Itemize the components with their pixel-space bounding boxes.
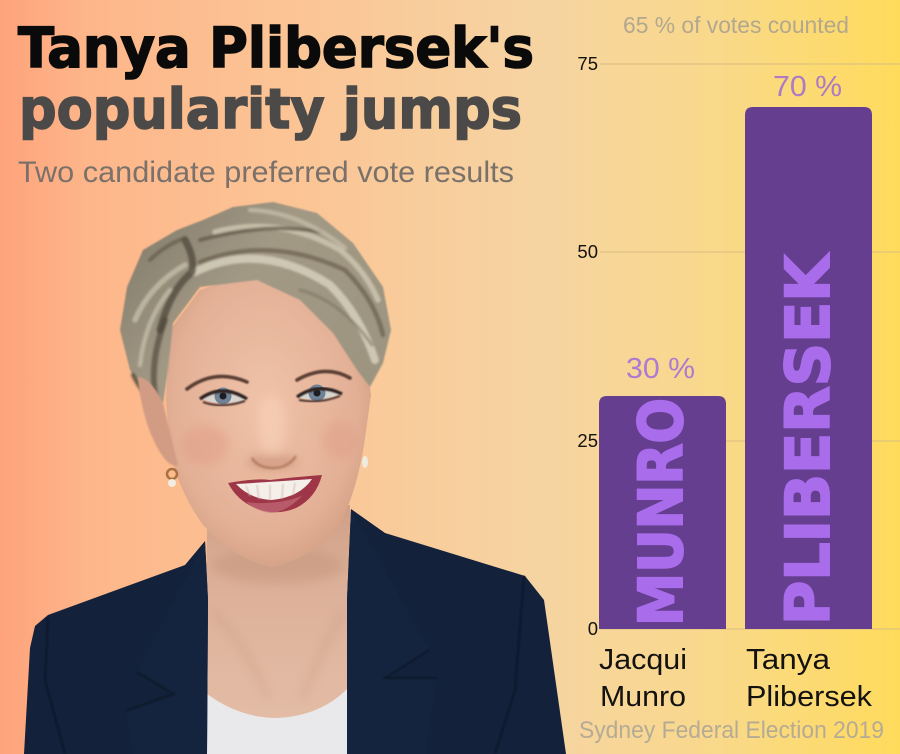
portrait: Tanya Plibersek (24, 202, 566, 754)
left ear (138, 377, 178, 466)
bar: Munro (599, 396, 726, 629)
jacket (24, 509, 566, 754)
y axis labels: 25 (577, 430, 598, 451)
eyebrows (187, 371, 350, 389)
y axis labels: 75 (577, 53, 598, 74)
hair (120, 202, 391, 403)
neck (205, 505, 350, 725)
neck creases (212, 610, 345, 700)
white top (205, 689, 349, 754)
face (166, 270, 371, 567)
bar: Plibersek (745, 107, 872, 629)
category label: Tanya Plibersek (746, 644, 873, 713)
source note: Sydney Federal Election 2019 (579, 717, 884, 744)
bar chart (577, 53, 900, 713)
category label: Jacqui Munro (599, 644, 687, 713)
value label: 30 %: 30 % (626, 353, 695, 385)
note: votes counted: 65 % of votes counted (623, 12, 849, 38)
cheek and nose shading (181, 395, 358, 469)
category label: Jacqui Munro: Jacqui (599, 644, 687, 676)
subtitle: Two candidate preferred vote results (18, 156, 514, 189)
mouth (228, 475, 322, 513)
category label: Tanya Plibersek: Plibersek (746, 681, 873, 713)
title (18, 16, 534, 141)
category label: Jacqui Munro: Munro (600, 681, 686, 713)
category label: Tanya Plibersek: Tanya (746, 644, 831, 676)
y axis labels: 50 (577, 241, 598, 262)
title line 1: Tanya Plibersek's (18, 16, 534, 80)
y axis labels (577, 53, 598, 639)
right eye (297, 384, 342, 402)
nose (252, 456, 296, 468)
left eye (200, 388, 247, 405)
gridlines (600, 64, 900, 629)
title line 2: popularity jumps (19, 77, 522, 141)
y axis labels: 0 (588, 618, 598, 639)
bar text: MUNRO: MUNRO (626, 398, 697, 626)
earrings (167, 456, 368, 487)
bar text: PLIBERSEK: PLIBERSEK (773, 252, 844, 625)
shadow under chin (212, 548, 344, 584)
hair strands (133, 210, 383, 400)
value label: 70 %: 70 % (773, 71, 842, 103)
